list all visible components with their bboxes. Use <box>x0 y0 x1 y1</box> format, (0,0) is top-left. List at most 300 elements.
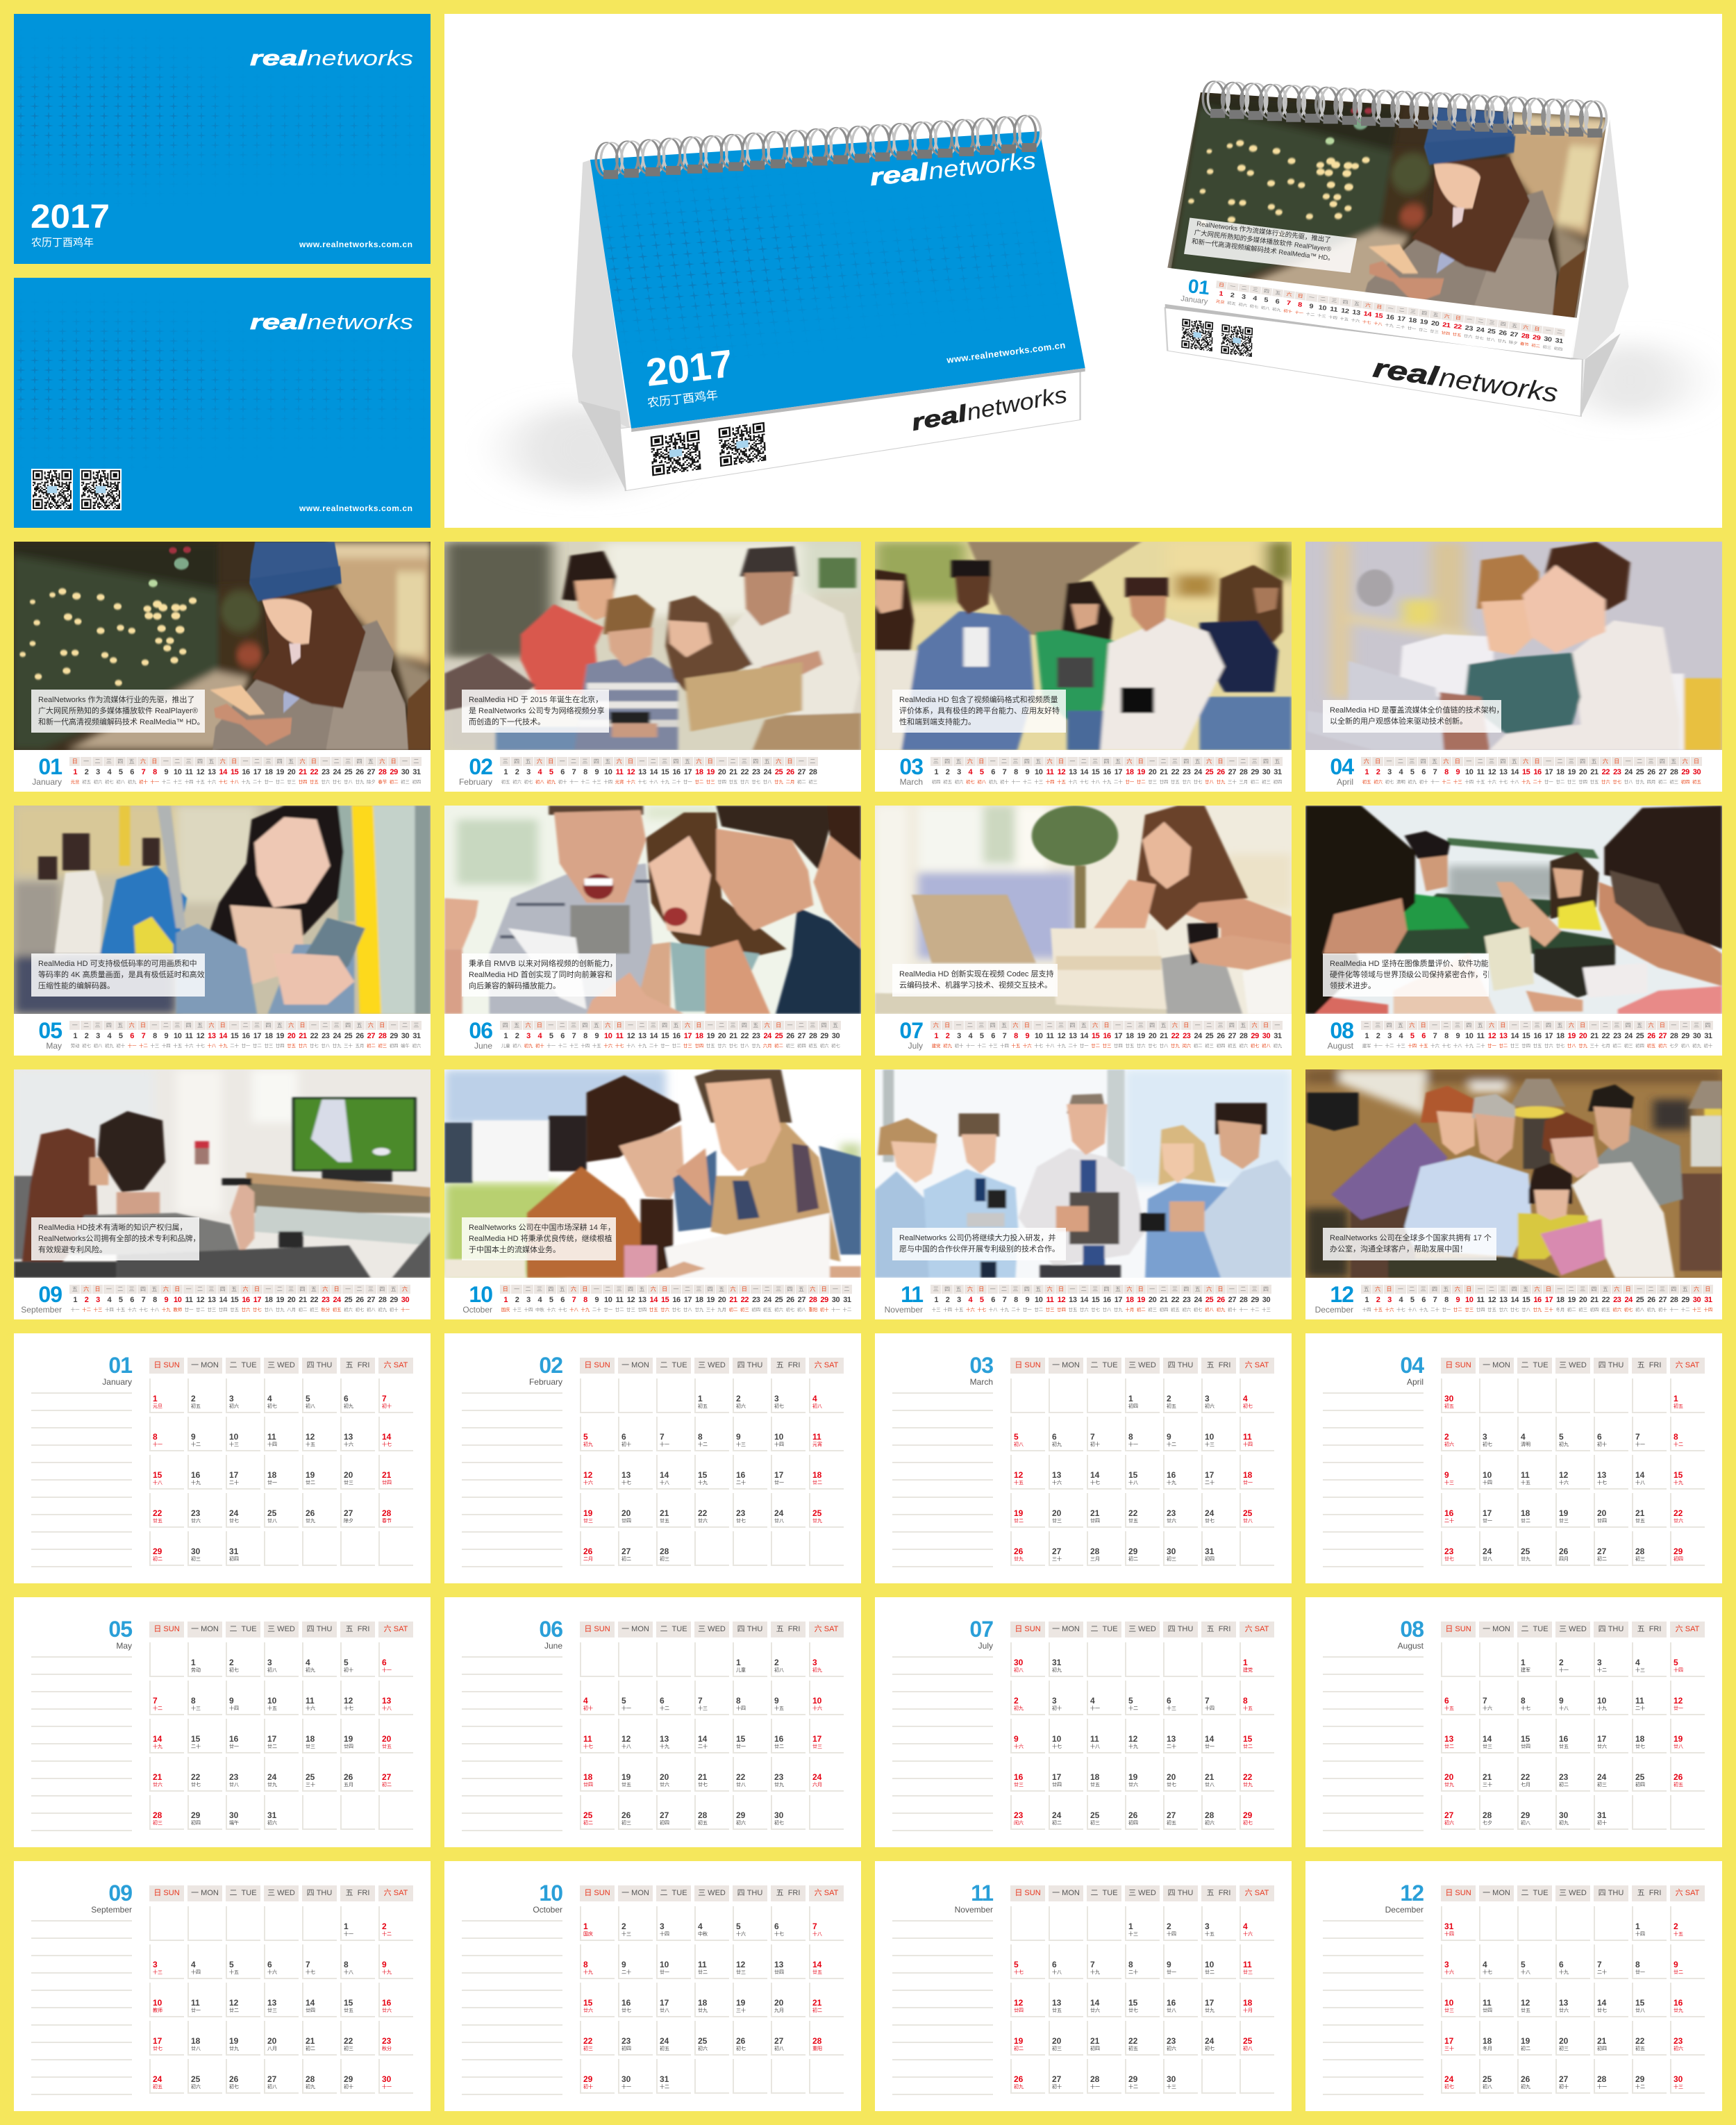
date strip: 28 <box>809 1296 817 1304</box>
date strip: 五 <box>1115 758 1121 764</box>
mockup: open calendar showing January: 4 <box>1253 295 1257 302</box>
date strip: 一 <box>1069 758 1075 764</box>
date strip: 五 <box>1240 1022 1246 1028</box>
calendar grid: 初六 <box>736 1404 746 1409</box>
caption: RealNetworks 公司在中国市场深耕 14 年， <box>469 1224 615 1232</box>
calendar grid: 4 <box>698 1922 703 1931</box>
calendar grid: 六 SAT <box>815 1625 838 1633</box>
date strip: 8 <box>1444 1296 1449 1304</box>
calendar grid: 廿一 <box>1243 1481 1253 1485</box>
date strip: 廿八 <box>344 780 353 785</box>
caption: RealMedia HD 是覆盖流媒体全价值链的技术架构， <box>1330 706 1501 715</box>
panel: July calendar page <box>875 1597 1292 1847</box>
note lines <box>31 1640 132 1831</box>
calendar grid: 三 WED <box>267 1889 295 1897</box>
date strip: 19 <box>707 1296 715 1304</box>
date strip: 廿一 <box>1487 1044 1496 1049</box>
calendar grid: 五 FRI <box>776 1361 800 1369</box>
date strip: 二 <box>1001 758 1007 764</box>
calendar grid: 初五 <box>1674 1783 1683 1788</box>
date strip: 28 <box>1670 1296 1678 1304</box>
calendar grid: 廿五 <box>382 1744 392 1749</box>
date strip: 四 <box>140 1286 146 1292</box>
date strip: 5 <box>980 1032 984 1040</box>
calendar grid: 廿一 <box>1205 1744 1215 1749</box>
calendar grid: 初二 <box>382 1783 392 1788</box>
calendar grid: 元旦 <box>153 1404 162 1409</box>
date strip: 六 <box>810 1286 815 1292</box>
mockup: open calendar showing January <box>1165 81 1688 418</box>
date strip: 3 <box>96 768 100 776</box>
mockup: open calendar showing January: 7 <box>1286 299 1291 307</box>
calendar grid: 十九 <box>1674 1481 1683 1485</box>
date strip: 五 <box>955 758 961 764</box>
date strip: 9 <box>1025 1032 1029 1040</box>
calendar grid: 十三 <box>153 1970 162 1975</box>
mockup: open calendar showing January: 3 <box>1241 293 1246 301</box>
date strip: 廿一 <box>1544 780 1553 785</box>
calendar grid: 初六 <box>1167 2047 1176 2051</box>
calendar grid: 初四 <box>1128 1821 1138 1826</box>
date strip: 初九 <box>1217 1308 1225 1312</box>
caption <box>1323 1228 1496 1260</box>
date strip: 16 <box>242 768 250 776</box>
date strip: 六 <box>402 1286 408 1292</box>
date strip: 一 <box>1626 758 1631 764</box>
date strip: 五 <box>72 1286 78 1292</box>
date strip: 初七 <box>524 780 533 785</box>
date strip: 28 <box>1670 768 1678 776</box>
date strip: 十三 <box>569 1044 578 1049</box>
date strip: 27 <box>1659 1296 1667 1304</box>
date strip: 9 <box>1025 768 1029 776</box>
date strip: 十九 <box>660 780 669 785</box>
month name: October <box>462 1305 492 1315</box>
calendar grid: 2 <box>382 1922 387 1931</box>
date strip: 十九 <box>1000 1308 1009 1312</box>
date strip: 十九 <box>242 780 250 785</box>
date strip: 重阳 <box>808 1308 817 1312</box>
calendar grid: 24 <box>153 2074 162 2084</box>
date strip: 五 <box>1512 758 1517 764</box>
calendar grid: 初八 <box>1243 2047 1253 2051</box>
calendar grid: 廿四 <box>621 1519 631 1524</box>
month number: 08 <box>1400 1617 1424 1642</box>
calendar grid: 初七 <box>229 2085 239 2090</box>
date strip: 日 <box>776 1022 781 1028</box>
caption: 等码率的 4K 高质量画面，是具有极低延时和高效 <box>38 971 205 979</box>
calendar grid: 19 <box>1128 1772 1137 1782</box>
date strip: 初三 <box>786 1044 794 1049</box>
month name: July <box>978 1641 993 1651</box>
date strip: 15 <box>231 1032 238 1040</box>
calendar grid: 十七 <box>1014 1970 1024 1975</box>
date strip: 日 <box>582 1286 587 1292</box>
date strip: 三 <box>1694 1022 1699 1028</box>
calendar grid: 日 SUN <box>584 1625 610 1633</box>
date strip: 二十 <box>1012 1308 1020 1312</box>
calendar grid: 廿二 <box>229 2008 239 2013</box>
date strip: 二十 <box>1533 780 1542 785</box>
calendar grid: 26 <box>229 2074 238 2084</box>
calendar grid: 初二 <box>1128 1557 1138 1562</box>
date strip: 19 <box>276 1296 284 1304</box>
date strip: 十一 <box>401 1308 410 1312</box>
date strip: 十七 <box>1499 780 1508 785</box>
date strip: 二 <box>810 758 815 764</box>
calendar grid: 日 SUN <box>584 1889 610 1897</box>
calendar grid: 31 <box>1052 1658 1061 1667</box>
date strip: 17 <box>1545 1296 1553 1304</box>
date strip: 30 <box>1262 1032 1270 1040</box>
calendar grid: 初八 <box>812 1404 822 1409</box>
calendar grid: 初二 <box>621 1557 631 1562</box>
calendar grid: 10 <box>812 1696 821 1706</box>
calendar grid: 27 <box>1052 1547 1061 1556</box>
date strip: 24 <box>333 1032 341 1040</box>
date strip: 六 <box>1443 758 1449 764</box>
date strip: 一 <box>1386 758 1392 764</box>
date strip: 一 <box>799 758 804 764</box>
photo: woman with laptop and phone <box>875 806 1292 1014</box>
date strip: 16 <box>1533 768 1542 776</box>
calendar grid: 5 <box>1014 1960 1019 1969</box>
date strip: 二 <box>1569 1286 1574 1292</box>
date strip: 初八 <box>367 1308 376 1312</box>
date strip: 一 <box>594 1286 599 1292</box>
date strip: 21 <box>729 768 737 776</box>
calendar grid: 19 <box>1014 1508 1023 1518</box>
date strip: 四 <box>821 1022 827 1028</box>
calendar grid: 初六 <box>229 1404 239 1409</box>
calendar grid: 11 <box>812 1432 821 1442</box>
date strip: 十三 <box>151 1044 159 1049</box>
date strip: 29 <box>1251 1032 1259 1040</box>
date strip: 初七 <box>786 1308 794 1312</box>
calendar grid: 1 <box>583 1922 588 1931</box>
calendar grid: 29 <box>1674 1547 1683 1556</box>
date strip: 廿九 <box>333 1044 342 1049</box>
calendar grid: 28 <box>1597 2074 1606 2084</box>
mockup: open calendar showing January: 廿一 <box>1407 326 1417 331</box>
date strip: 廿四 <box>694 1044 703 1049</box>
date strip: 13 <box>1499 1296 1508 1304</box>
calendar grid: 十三 <box>621 1932 631 1937</box>
calendar grid: 廿三 <box>267 2008 277 2013</box>
calendar grid: 28 <box>153 1810 162 1820</box>
date strip: 四 <box>787 1286 792 1292</box>
date strip: 六 <box>776 758 781 764</box>
calendar grid: 廿三 <box>1014 1783 1024 1788</box>
date strip: 一 <box>719 758 724 764</box>
calendar grid: 四 THU <box>737 1889 762 1897</box>
date strip: 17 <box>253 768 261 776</box>
date strip: 二 <box>94 758 100 764</box>
date strip: 8 <box>1444 768 1449 776</box>
calendar grid: 廿八 <box>736 1783 746 1788</box>
date strip: 8 <box>583 1296 587 1304</box>
date strip <box>500 1285 852 1312</box>
date strip: 11 <box>616 1296 624 1304</box>
date strip: 31 <box>1704 1032 1712 1040</box>
calendar grid: 6 <box>1444 1696 1449 1706</box>
calendar grid: 18 <box>1243 1998 1252 2008</box>
calendar grid: 29 <box>1128 1547 1137 1556</box>
date strip: 三 <box>186 758 192 764</box>
calendar grid: 十四 <box>1167 1932 1176 1937</box>
date strip: 廿五 <box>230 1308 239 1312</box>
date strip: 11 <box>1477 768 1485 776</box>
calendar grid: 廿四 <box>1090 1519 1100 1524</box>
date strip: 四 <box>1592 1286 1597 1292</box>
calendar grid: 十七 <box>306 1970 315 1975</box>
date strip: 初十 <box>535 1044 544 1049</box>
panel: May photo page <box>14 806 431 1056</box>
calendar grid: 十七 <box>583 1744 593 1749</box>
calendar grid: 初八 <box>774 2047 784 2051</box>
mockup: open calendar showing January: 十八 <box>1374 322 1383 326</box>
date strip: 初七 <box>356 1308 364 1312</box>
date strip: 二 <box>356 1286 362 1292</box>
calendar grid: 7 <box>1635 1432 1640 1442</box>
date strip: 18 <box>695 768 703 776</box>
caption <box>31 690 205 733</box>
date strip: 初二 <box>1567 1308 1576 1312</box>
date strip: 20 <box>287 1032 295 1040</box>
date strip: 12 <box>1488 1296 1496 1304</box>
date strip: 四 <box>197 758 203 764</box>
calendar grid: 17 <box>267 1734 276 1744</box>
calendar grid: 21 <box>1090 2036 1099 2046</box>
mockup: open calendar showing January: 一 <box>1387 306 1394 311</box>
calendar grid: 9 <box>1167 1960 1171 1969</box>
calendar grid: 十八 <box>1559 1706 1569 1711</box>
calendar grid: 19 <box>1674 1734 1683 1744</box>
date strip: 四 <box>1705 1022 1710 1028</box>
date strip: 14 <box>650 1032 658 1040</box>
calendar grid: 廿八 <box>267 1519 277 1524</box>
calendar grid: 13 <box>267 1998 276 2008</box>
date strip: 20 <box>287 768 295 776</box>
calendar grid: 29 <box>191 1810 200 1820</box>
date strip: 二 <box>243 1022 249 1028</box>
date strip: 一 <box>1274 1022 1280 1028</box>
date strip: 三 <box>651 1022 656 1028</box>
mockup: open calendar showing January: 十四 <box>1328 315 1337 320</box>
date strip: 18 <box>1126 1032 1134 1040</box>
calendar grid: 初十 <box>1090 1442 1100 1447</box>
date strip: 廿五 <box>729 780 737 785</box>
month number: 10 <box>469 1282 492 1307</box>
date strip: 廿四 <box>1114 1044 1123 1049</box>
calendar grid: 二 TUE <box>1521 1889 1549 1897</box>
calendar grid: 一 MON <box>1052 1625 1080 1633</box>
date strip: 初四 <box>1590 1308 1599 1312</box>
date strip: 六 <box>1409 1022 1414 1028</box>
date strip: 二 <box>1240 1286 1246 1292</box>
date strip: 十九 <box>1103 780 1111 785</box>
month name: May <box>116 1641 132 1651</box>
date strip: 廿一 <box>1125 780 1134 785</box>
date strip: 1 <box>73 1032 77 1040</box>
date strip: 日 <box>1263 1022 1269 1028</box>
calendar grid: 24 <box>812 1772 821 1782</box>
calendar grid: 28 <box>382 1508 391 1518</box>
date strip: 六 <box>1648 1022 1653 1028</box>
date strip: 初三 <box>1148 1308 1157 1312</box>
date strip: 初十 <box>1658 1308 1667 1312</box>
date strip: 初六 <box>820 1044 829 1049</box>
date strip: 初四 <box>1217 1044 1225 1049</box>
date strip: 1 <box>503 1296 508 1304</box>
date strip: 16 <box>672 768 681 776</box>
date strip: 二十 <box>1476 1044 1485 1049</box>
calendar grid: 廿一 <box>1635 1970 1645 1975</box>
date strip: 二 <box>639 1022 644 1028</box>
date strip: 初六 <box>94 780 102 785</box>
date strip: 初九 <box>1274 1044 1282 1049</box>
date strip: 十三 <box>173 780 182 785</box>
caption: RealMedia HD 包含了视频编码格式和视频质量 <box>899 696 1058 704</box>
mockup: open calendar showing January: 廿八 <box>1486 337 1495 342</box>
calendar grid: 17 <box>774 1470 783 1480</box>
date strip: 26 <box>1217 1032 1225 1040</box>
date strip: 初十 <box>1704 1044 1712 1049</box>
calendar grid: 二十 <box>191 1744 201 1749</box>
date strip: 六 <box>731 1286 736 1292</box>
date strip: 廿九 <box>694 1308 703 1312</box>
date strip: 廿九 <box>774 780 783 785</box>
date strip: 初九 <box>1647 1308 1655 1312</box>
date strip: 廿五 <box>1533 1044 1542 1049</box>
caption: 评价体系，具有极佳的跨平台能力、应用友好特 <box>899 707 1060 715</box>
calendar grid: 30 <box>1444 1394 1453 1403</box>
calendar grid: 10 <box>1444 1998 1453 2008</box>
date strip: 三 <box>1409 758 1414 764</box>
date strip: 初四 <box>1681 780 1690 785</box>
date strip: 20 <box>287 1296 295 1304</box>
date strip: 六月 <box>763 1044 772 1049</box>
calendar grid: 17 <box>1597 1734 1606 1744</box>
date strip: 三月 <box>1239 780 1248 785</box>
date strip: 一 <box>265 1286 271 1292</box>
date strip: 十一 <box>546 1044 556 1049</box>
date strip: 24 <box>1624 768 1633 776</box>
date strip: 日 <box>1217 758 1223 764</box>
calendar grid: 三 WED <box>1128 1625 1156 1633</box>
caption <box>462 1217 616 1260</box>
month number: 04 <box>1330 754 1353 779</box>
date strip: 三 <box>537 1286 542 1292</box>
date strip: 十四 <box>1408 1044 1417 1049</box>
mockup: open calendar showing January: 25 <box>1487 328 1496 335</box>
calendar grid: 廿六 <box>153 1783 162 1788</box>
date strip: 一 <box>243 758 249 764</box>
calendar grid: 廿四 <box>1597 1519 1607 1524</box>
date strip: 29 <box>390 1032 398 1040</box>
date strip: 初二 <box>1137 1308 1146 1312</box>
date strip: 一 <box>163 758 169 764</box>
date strip: 六 <box>1252 1022 1258 1028</box>
date strip: 六 <box>651 1286 656 1292</box>
date strip: 日 <box>72 758 78 764</box>
date strip: 14 <box>1080 1032 1088 1040</box>
calendar grid: 十一 <box>1090 2085 1100 2090</box>
calendar grid: 初二 <box>306 2047 315 2051</box>
date strip: 五 <box>311 1286 317 1292</box>
date strip: 十二 <box>1681 1308 1690 1312</box>
caption <box>892 1228 1066 1260</box>
calendar grid: 21 <box>1090 1508 1099 1518</box>
mockup: open calendar showing January: 二 <box>1320 296 1326 302</box>
calendar grid: 初九 <box>812 1668 822 1673</box>
date strip: 一 <box>345 1286 351 1292</box>
date strip: 初四 <box>1635 1044 1644 1049</box>
calendar grid: 二 TUE <box>1090 1361 1118 1369</box>
panel: January calendar page <box>14 1333 431 1583</box>
calendar grid: 12 <box>306 1432 315 1442</box>
calendar grid: 7 <box>660 1432 665 1442</box>
date strip: 三 <box>1375 1022 1380 1028</box>
date strip: 三 <box>254 1022 260 1028</box>
calendar grid: 7 <box>153 1696 158 1706</box>
date strip: 五 <box>753 1022 758 1028</box>
calendar grid: 四 THU <box>1168 1625 1193 1633</box>
date strip: 一 <box>1671 1022 1676 1028</box>
calendar grid: 30 <box>1167 2074 1176 2084</box>
mockup: open calendar showing January: 21 <box>1442 322 1451 329</box>
calendar grid: 初六 <box>1205 1404 1215 1409</box>
calendar grid: 初九 <box>1014 1706 1024 1711</box>
calendar grid: 24 <box>1052 1810 1061 1820</box>
date strip: 22 <box>741 1032 749 1040</box>
date strip: 12 <box>627 1032 635 1040</box>
calendar grid: 8 <box>191 1696 196 1706</box>
date strip: 廿八 <box>1521 1308 1530 1312</box>
date strip: 五 <box>1035 1286 1041 1292</box>
calendar grid: 28 <box>1090 1547 1099 1556</box>
calendar grid: 11 <box>1635 1696 1644 1706</box>
date strip: 16 <box>1103 768 1111 776</box>
calendar grid: 初六 <box>1674 2047 1683 2051</box>
date strip: 二 <box>1478 758 1483 764</box>
date strip: 9 <box>1025 1296 1029 1304</box>
caption <box>462 690 609 733</box>
calendar grid: 二 TUE <box>660 1625 687 1633</box>
date strip: 22 <box>1602 1296 1610 1304</box>
date strip: 廿一 <box>683 780 692 785</box>
calendar grid: 11 <box>1243 1960 1252 1969</box>
date strip: 15 <box>1522 768 1530 776</box>
calendar grid: 二 TUE <box>1521 1625 1549 1633</box>
month name: April <box>1337 777 1353 787</box>
date strip: 三 <box>106 758 112 764</box>
calendar grid: 12 <box>736 1960 745 1969</box>
date strip: 10 <box>1465 1296 1473 1304</box>
date strip: 初二 <box>299 1308 307 1312</box>
caption: RealMedia HD 于 2015 年诞生在北京， <box>469 696 603 704</box>
calendar grid: 廿六 <box>1167 1519 1176 1524</box>
date strip: 廿六 <box>717 1044 726 1049</box>
date strip: 初十 <box>390 1308 399 1312</box>
calendar grid: 18 <box>306 1734 315 1744</box>
date strip: 廿三 <box>706 780 715 785</box>
date strip: 4 <box>1399 768 1403 776</box>
date strip: 四 <box>1512 1286 1517 1292</box>
mockup: open calendar showing January: 廿二 <box>1419 328 1428 333</box>
calendar grid: 十一 <box>382 1668 392 1673</box>
date strip: 初八 <box>94 1044 102 1049</box>
